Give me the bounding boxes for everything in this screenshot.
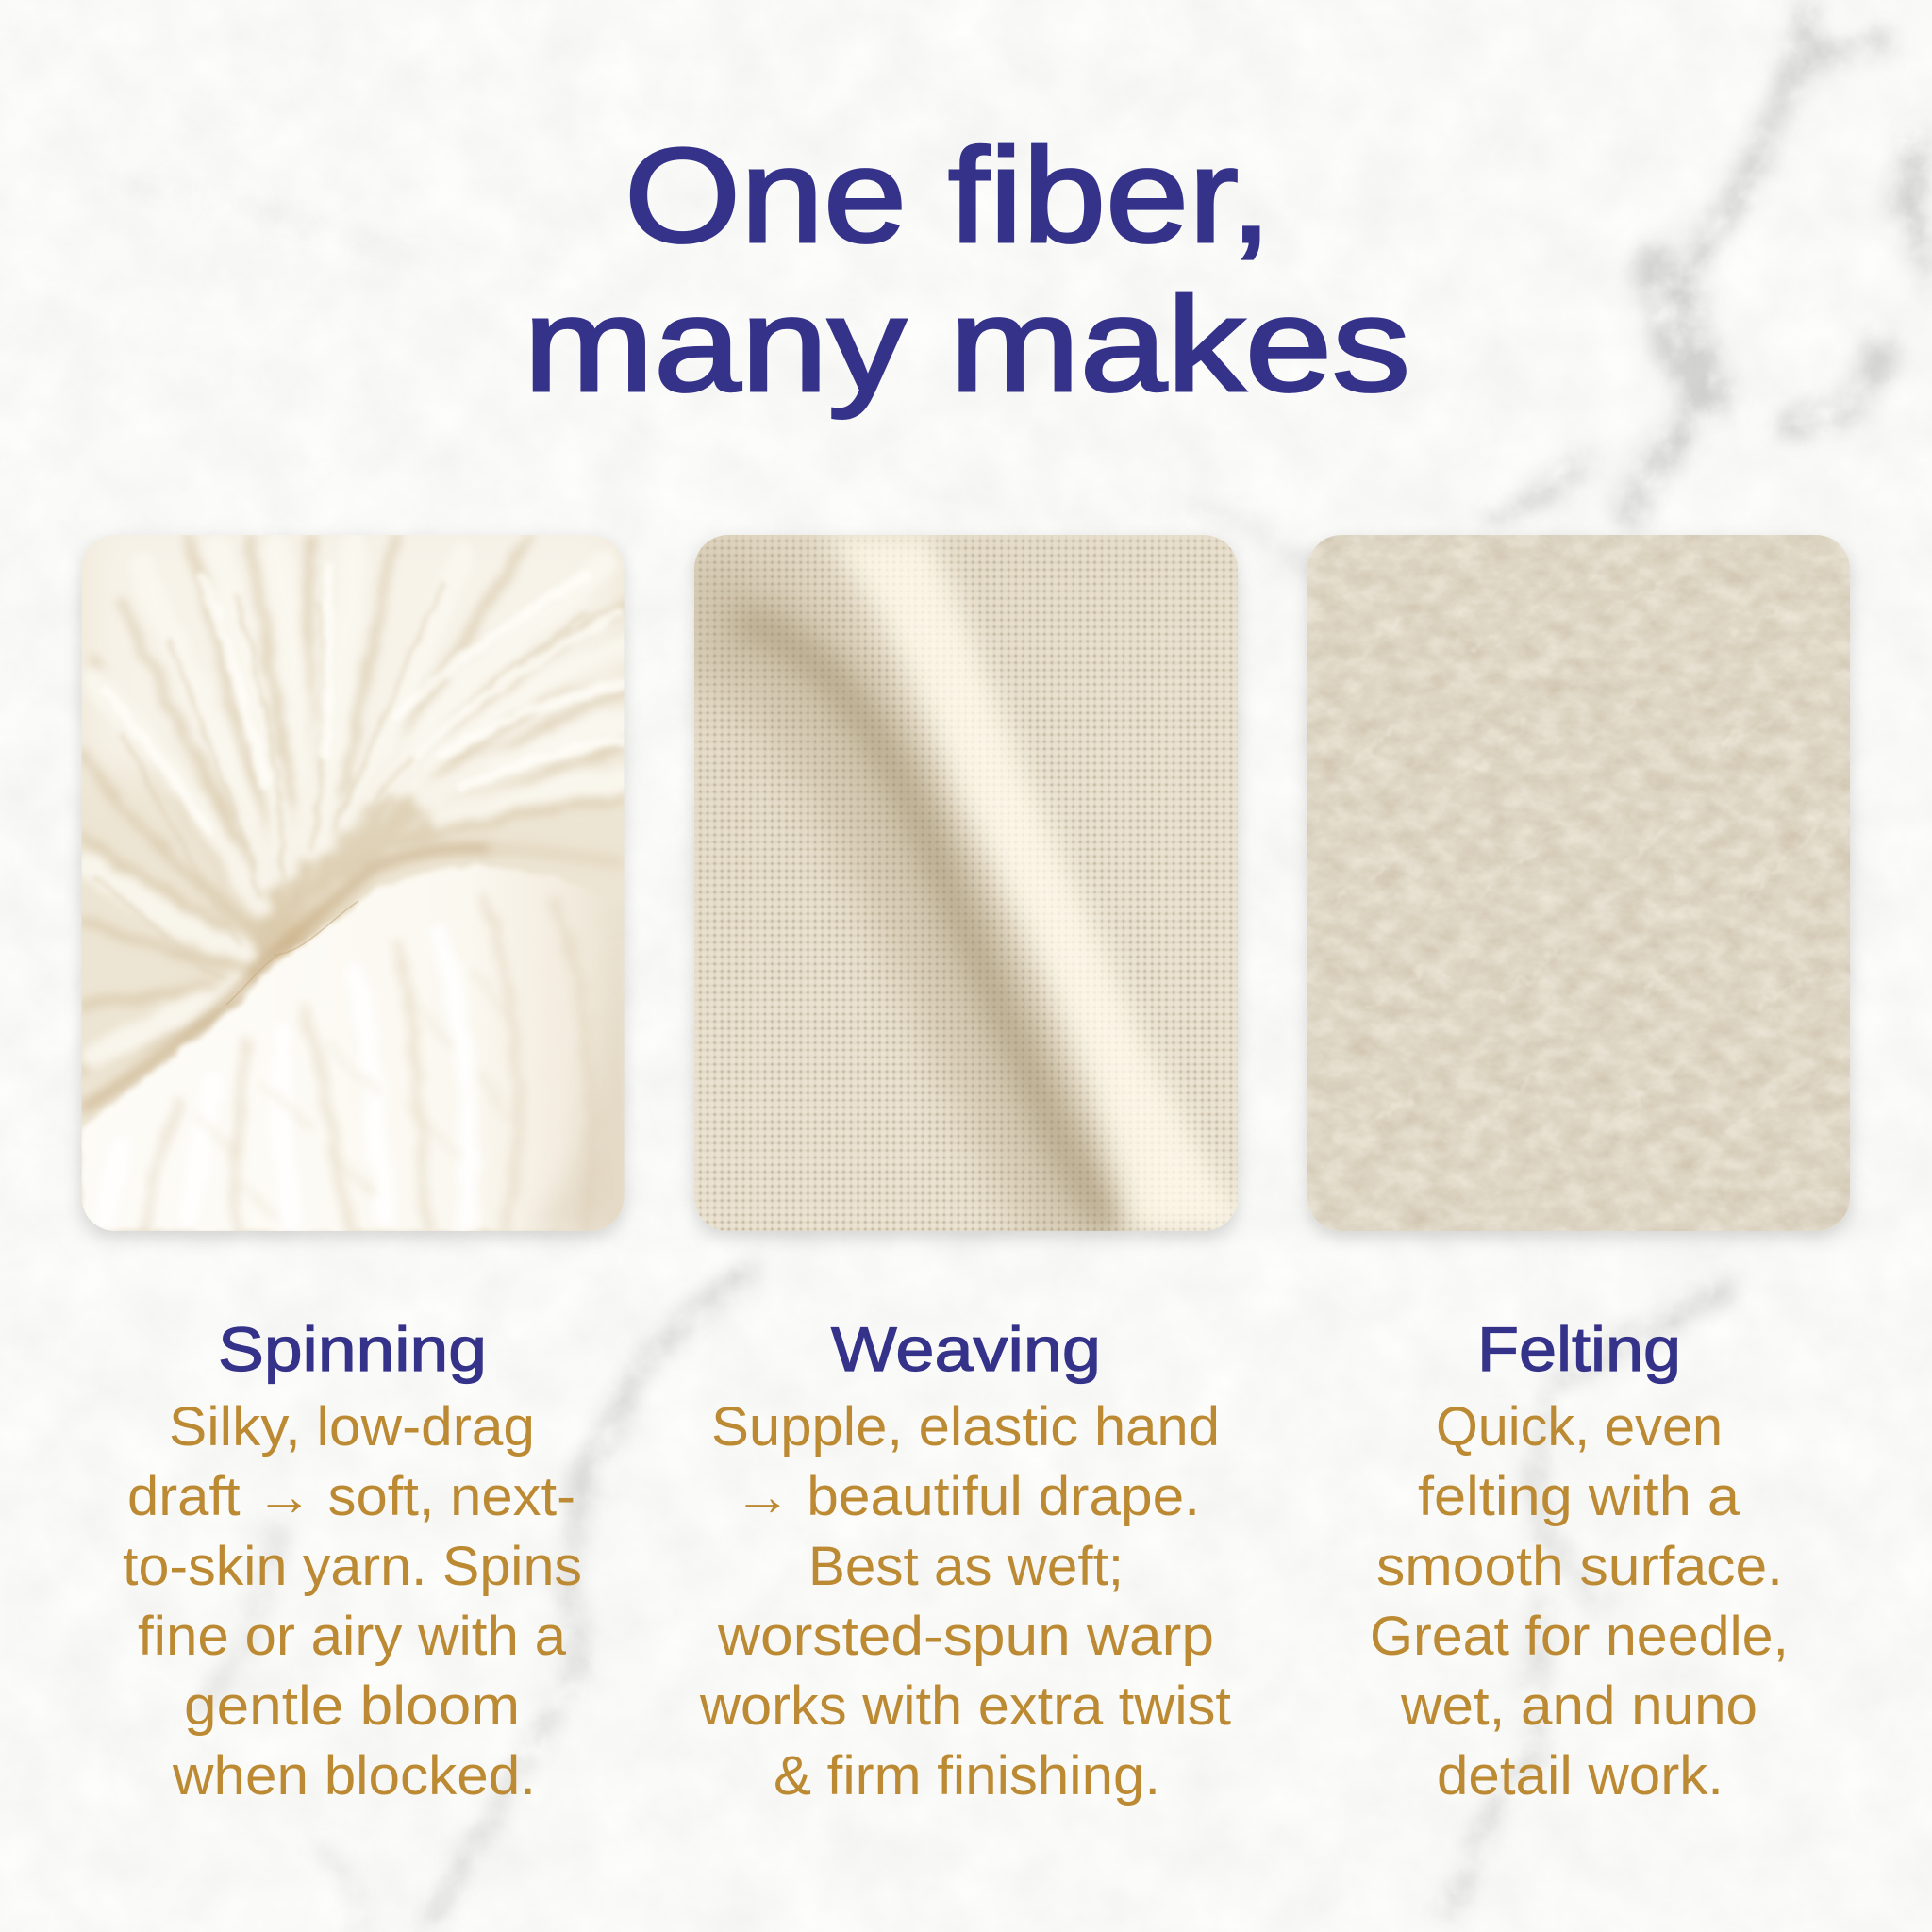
panel: weaving cloth photo — [679, 535, 1255, 1231]
description: felting: wet, and nuno — [1400, 1675, 1757, 1737]
description: weaving: Supple, elastic hand — [711, 1396, 1220, 1457]
title: many makes — [524, 270, 1410, 420]
description: spinning: to-skin yarn. Spins — [123, 1536, 582, 1597]
description: felting: smooth surface. — [1376, 1536, 1783, 1597]
yarn crease — [81, 848, 491, 1109]
description: felting: Great for needle, — [1370, 1606, 1789, 1667]
description: spinning: gentle bloom — [184, 1675, 520, 1737]
panel: spinning yarn photo — [81, 509, 625, 1231]
yarn lower body — [81, 867, 624, 1231]
description: weaving: → beautiful drape. — [734, 1466, 1200, 1527]
description: spinning: Silky, low-drag — [169, 1396, 535, 1457]
weave texture — [694, 535, 1238, 1231]
description: felting: felting with a — [1418, 1466, 1740, 1527]
description: weaving — [699, 1396, 1231, 1807]
title — [524, 121, 1410, 420]
description: weaving: & firm finishing. — [774, 1745, 1160, 1807]
text block: weaving — [699, 1314, 1231, 1807]
felt wisps — [1330, 585, 1821, 1141]
description: weaving: works with extra twist — [699, 1675, 1231, 1737]
cloth highlight band — [821, 535, 1255, 1231]
description: spinning: draft → soft, next- — [127, 1466, 575, 1527]
description: spinning — [123, 1396, 582, 1807]
yarn loose fibers — [226, 901, 358, 1005]
description: felting: detail work. — [1437, 1745, 1724, 1807]
heading: felting: Felting — [1477, 1314, 1681, 1384]
description: spinning: when blocked. — [172, 1745, 536, 1807]
panel: felting felt photo — [1307, 535, 1850, 1231]
cloth fold shadow — [679, 613, 1099, 1231]
text block: felting — [1370, 1314, 1789, 1807]
description: felting: Quick, even — [1436, 1396, 1723, 1457]
yarn upper fan — [81, 538, 624, 1071]
text block: spinning — [123, 1314, 582, 1807]
description: weaving: Best as weft; — [808, 1536, 1124, 1597]
heading: spinning: Spinning — [218, 1314, 487, 1384]
title: One fiber, — [625, 121, 1272, 271]
description: felting — [1370, 1396, 1789, 1807]
description: weaving: worsted-spun warp — [717, 1606, 1214, 1667]
heading: weaving: Weaving — [831, 1314, 1101, 1384]
description: spinning: fine or airy with a — [138, 1606, 567, 1667]
